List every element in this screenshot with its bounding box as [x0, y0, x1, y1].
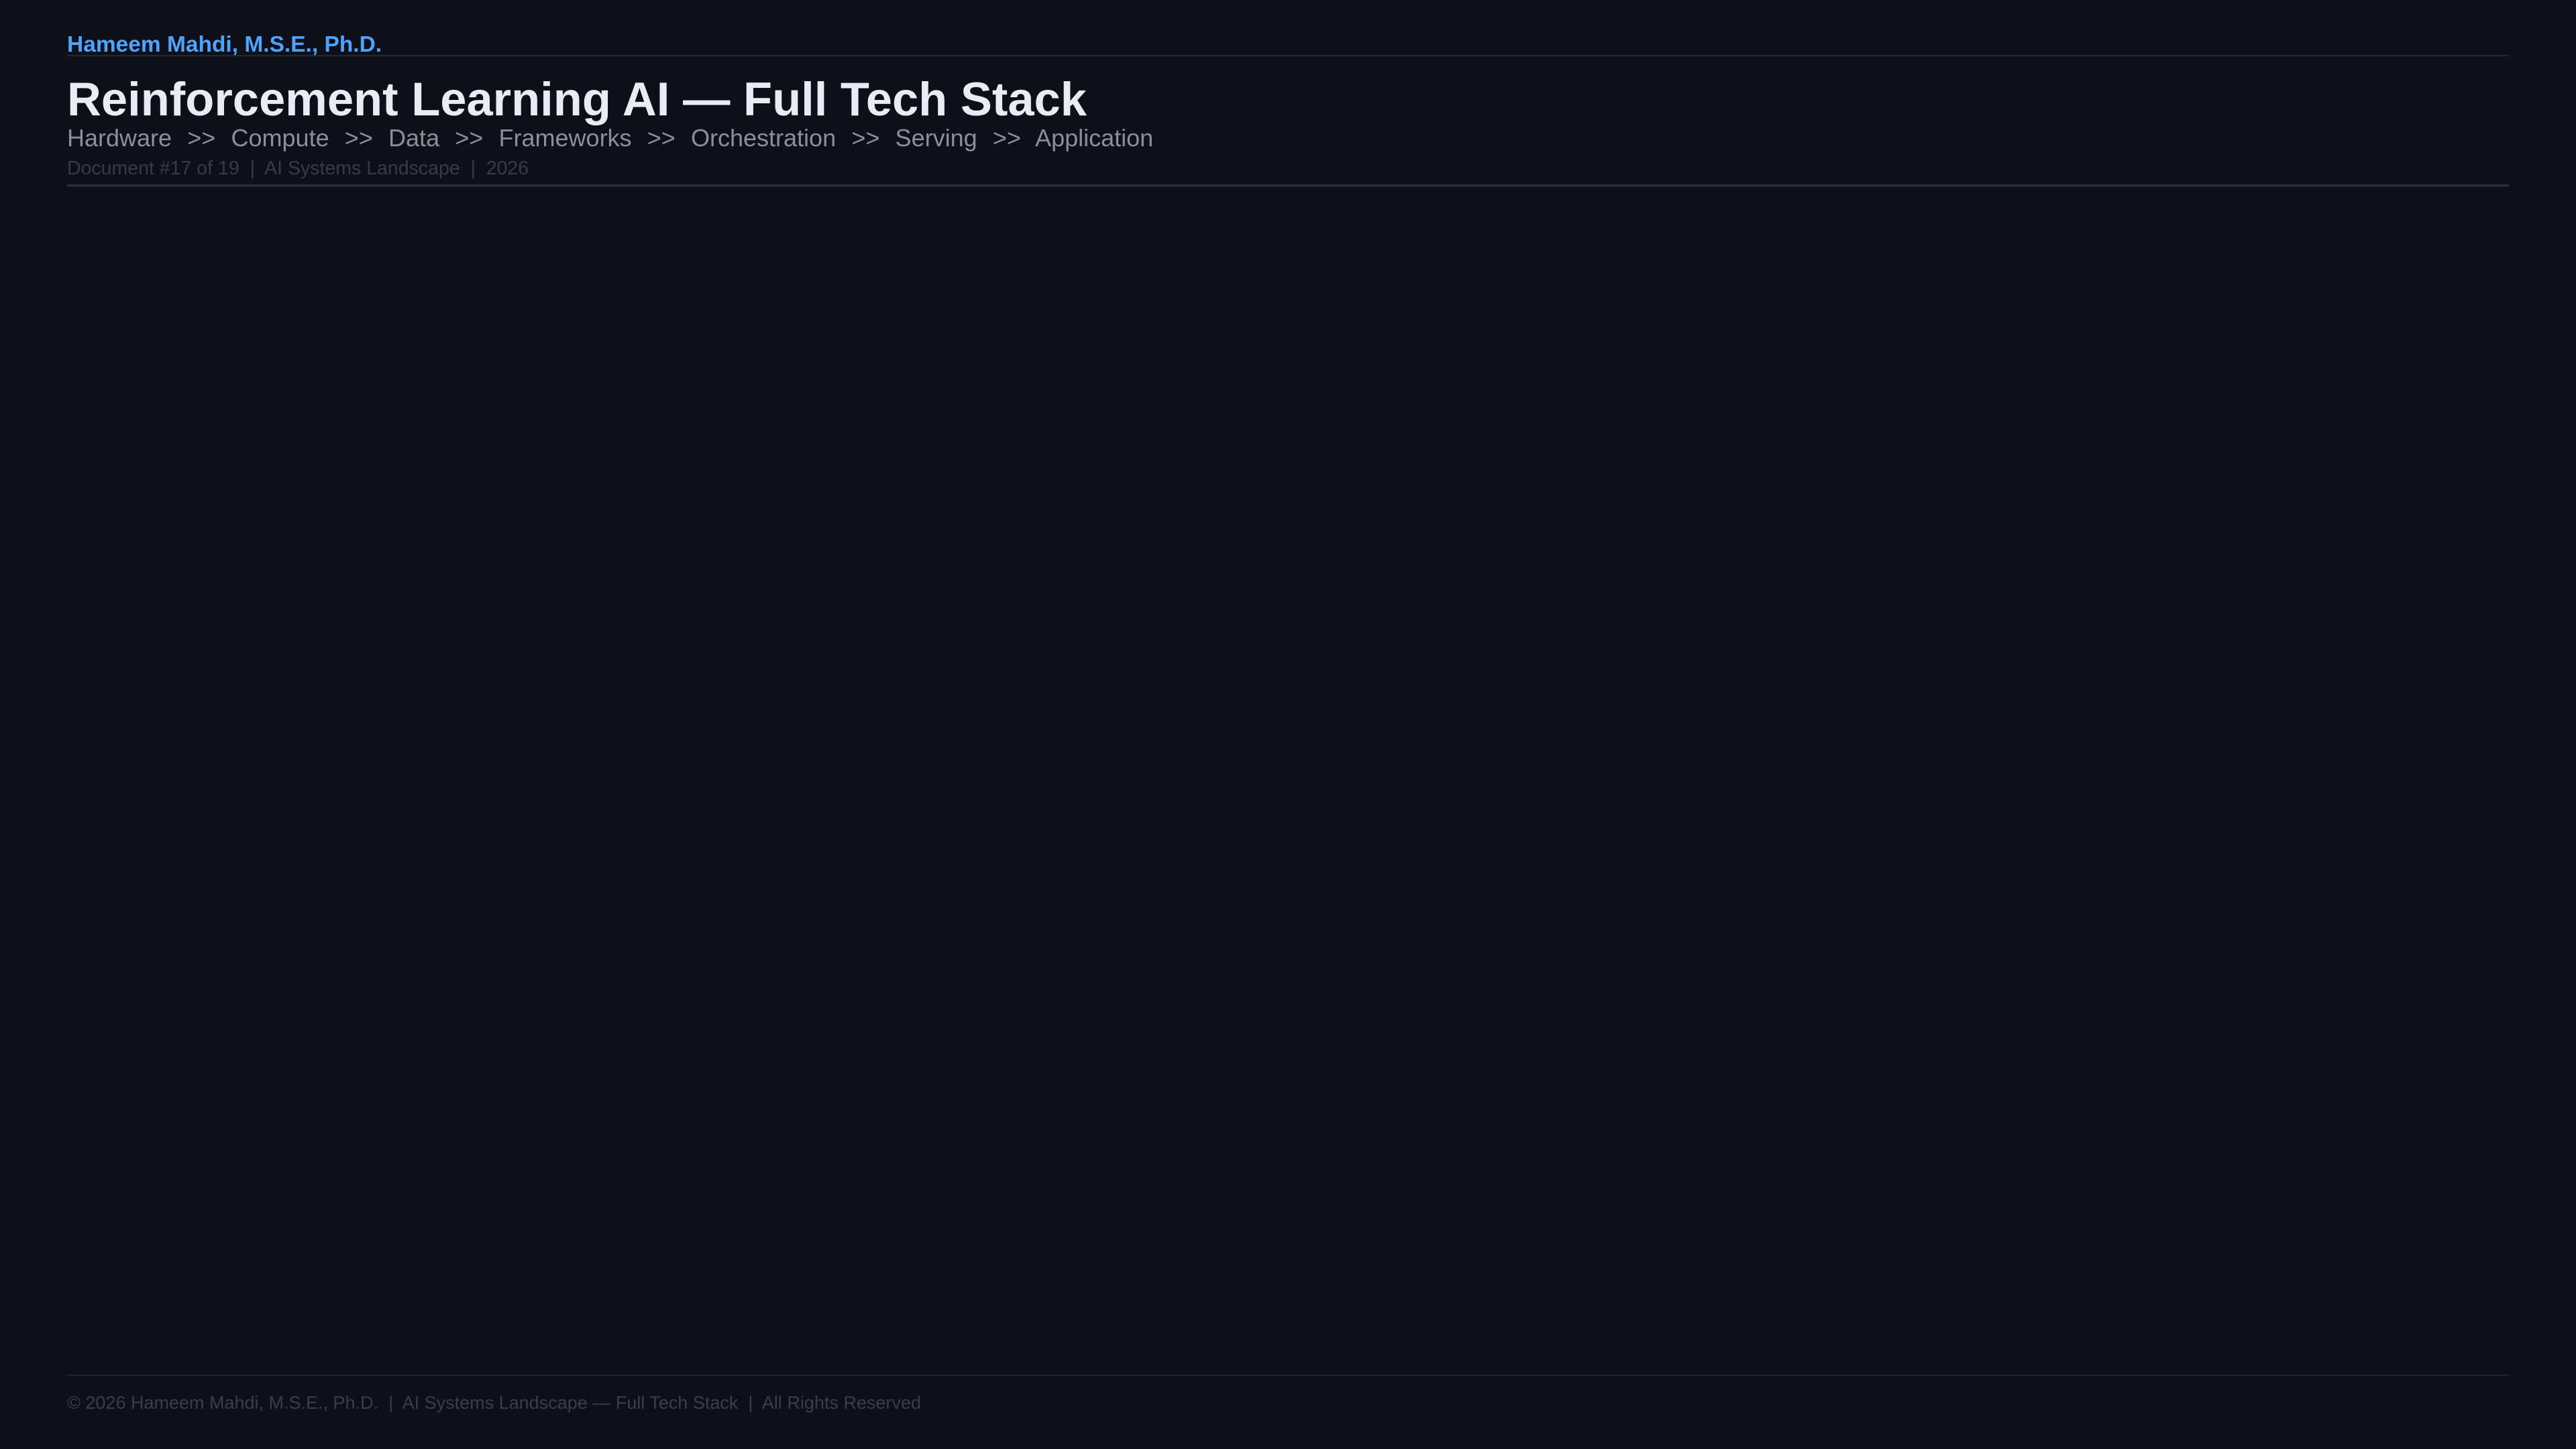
footer: © 2026 Hameem Mahdi, M.S.E., Ph.D. | AI Systems Landscape — Full Tech Stack | All Rights Reserved — [67, 1393, 921, 1413]
author name: Hameem Mahdi, M.S.E., Ph.D. — [67, 32, 382, 57]
title: Reinforcement Learning AI — Full Tech Stack — [67, 72, 1087, 125]
subtitle: stack layers: Hardware >> Compute >> Data >> Frameworks >> Orchestration >> Serving >> Application — [67, 124, 1153, 152]
document info: Document #17 of 19 | AI Systems Landscape | 2026 — [67, 158, 529, 179]
